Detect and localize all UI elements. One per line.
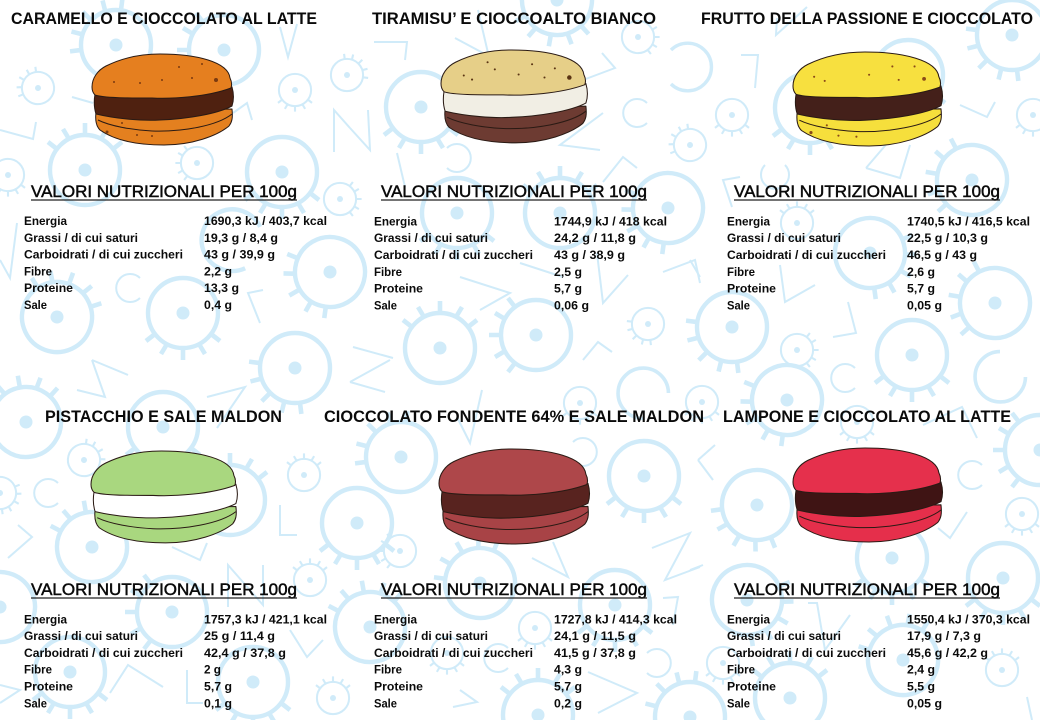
nutrition table: Fibre xyxy=(727,265,755,279)
nutrition table: Grassi / di cui saturi xyxy=(24,629,138,643)
title: CIOCCOLATO FONDENTE 64% E SALE MALDON xyxy=(324,408,704,426)
nutrition table: Carboidrati / di cui zuccheri xyxy=(24,646,183,660)
nutrition table: 0,05 g xyxy=(907,696,942,710)
nutrition table: Proteine xyxy=(374,680,423,694)
nutrition table: Sale xyxy=(727,298,750,312)
nutrition table: 24,1 g / 11,5 g xyxy=(554,629,636,643)
nutrition table: 13,3 g xyxy=(204,281,239,295)
panel: tiramisu xyxy=(372,10,667,312)
nutrition table: Carboidrati / di cui zuccheri xyxy=(24,248,183,262)
nutrition table: 42,4 g / 37,8 g xyxy=(204,646,286,660)
nutrition table: 0,4 g xyxy=(204,298,232,312)
nutrition table: 17,9 g / 7,3 g xyxy=(907,629,981,643)
nutrition table: 2,6 g xyxy=(907,265,935,279)
nutrition table xyxy=(374,214,667,312)
nutrition table: 2,5 g xyxy=(554,265,582,279)
macaron illustration: caramello xyxy=(92,54,234,145)
nutrition table: Grassi / di cui saturi xyxy=(374,629,488,643)
nutrition table xyxy=(727,612,1030,710)
nutrition table: Proteine xyxy=(24,680,73,694)
title: PISTACCHIO E SALE MALDON xyxy=(45,408,282,426)
nutrition table: Energia xyxy=(24,612,67,626)
nutrition table: 4,3 g xyxy=(554,663,582,677)
nutrition table: 25 g / 11,4 g xyxy=(204,629,275,643)
nutrition table: Sale xyxy=(24,298,47,312)
nutrition table: 0,1 g xyxy=(204,696,232,710)
nutrition table: 43 g / 38,9 g xyxy=(554,248,625,262)
nutrition table: 1744,9 kJ / 418 kcal xyxy=(554,214,667,228)
nutrition table: Energia xyxy=(374,612,417,626)
nutrition table: Sale xyxy=(374,298,397,312)
nutrition table: 5,7 g xyxy=(554,282,582,296)
nutrition table: 41,5 g / 37,8 g xyxy=(554,646,636,660)
nutrition table: Carboidrati / di cui zuccheri xyxy=(374,646,533,660)
nutrition table: Sale xyxy=(374,696,397,710)
macaron illustration: pistacchio xyxy=(91,451,237,543)
nutrition table: 1757,3 kJ / 421,1 kcal xyxy=(204,612,327,626)
nutrition table: Energia xyxy=(24,214,67,228)
heading with underline: VALORI NUTRIZIONALI PER 100g xyxy=(31,580,297,599)
nutrition table: Carboidrati / di cui zuccheri xyxy=(727,248,886,262)
nutrition table: 5,7 g xyxy=(204,680,232,694)
nutrition table: 19,3 g / 8,4 g xyxy=(204,231,278,245)
panel: frutto della passione xyxy=(701,10,1033,312)
nutrition table: 2 g xyxy=(204,663,221,677)
heading with underline: VALORI NUTRIZIONALI PER 100g xyxy=(734,580,1000,599)
nutrition table: 46,5 g / 43 g xyxy=(907,248,977,262)
nutrition table: Carboidrati / di cui zuccheri xyxy=(727,646,886,660)
nutrition table: 2,4 g xyxy=(907,663,935,677)
nutrition table: 2,2 g xyxy=(204,264,232,278)
nutrition table: 0,05 g xyxy=(907,298,942,312)
macaron illustration: cioccolato fondente xyxy=(439,449,590,544)
nutrition table: 24,2 g / 11,8 g xyxy=(554,231,636,245)
nutrition table: Energia xyxy=(374,214,417,228)
nutrition table: Grassi / di cui saturi xyxy=(727,231,841,245)
heading with underline: VALORI NUTRIZIONALI PER 100g xyxy=(734,182,1000,201)
nutrition table: Carboidrati / di cui zuccheri xyxy=(374,248,533,262)
panel: pistacchio xyxy=(24,408,327,710)
title: FRUTTO DELLA PASSIONE E CIOCCOLATO xyxy=(701,10,1033,28)
nutrition table: Energia xyxy=(727,612,770,626)
nutrition table: Fibre xyxy=(374,265,402,279)
nutrition table: 1690,3 kJ / 403,7 kcal xyxy=(204,214,327,228)
nutrition table: 0,06 g xyxy=(554,298,589,312)
panel: lampone xyxy=(723,408,1030,710)
nutrition table: Fibre xyxy=(727,663,755,677)
panel: caramello xyxy=(11,10,327,312)
nutrition table: 5,7 g xyxy=(907,282,935,296)
title: CARAMELLO E CIOCCOLATO AL LATTE xyxy=(11,10,317,28)
nutrition table: 0,2 g xyxy=(554,696,582,710)
nutrition table: Energia xyxy=(727,214,770,228)
nutrition table xyxy=(727,214,1030,312)
heading with underline: VALORI NUTRIZIONALI PER 100g xyxy=(381,182,647,201)
nutrition table: Grassi / di cui saturi xyxy=(727,629,841,643)
macaron illustration: tiramisu xyxy=(441,50,587,143)
nutrition table: Proteine xyxy=(727,680,776,694)
nutrition table xyxy=(24,214,327,312)
title: TIRAMISU’ E CIOCCOALTO BIANCO xyxy=(372,10,656,28)
nutrition table: Fibre xyxy=(24,264,52,278)
panel: cioccolato fondente xyxy=(324,408,704,710)
nutrition table: Sale xyxy=(24,696,47,710)
nutrition table: 22,5 g / 10,3 g xyxy=(907,231,988,245)
macaron illustration: lampone xyxy=(793,448,943,542)
heading with underline: VALORI NUTRIZIONALI PER 100g xyxy=(31,182,297,201)
nutrition table: Sale xyxy=(727,696,750,710)
nutrition table: Proteine xyxy=(727,282,776,296)
heading with underline: VALORI NUTRIZIONALI PER 100g xyxy=(381,580,647,599)
nutrition table: 1740,5 kJ / 416,5 kcal xyxy=(907,214,1030,228)
nutrition table: 1727,8 kJ / 414,3 kcal xyxy=(554,612,677,626)
nutrition table: Grassi / di cui saturi xyxy=(24,231,138,245)
nutrition table: Proteine xyxy=(374,282,423,296)
nutrition table: 45,6 g / 42,2 g xyxy=(907,646,988,660)
nutrition table: 1550,4 kJ / 370,3 kcal xyxy=(907,612,1030,626)
macaron illustration: frutto della passione xyxy=(793,52,943,146)
nutrition table: Fibre xyxy=(374,663,402,677)
nutrition table: Proteine xyxy=(24,281,73,295)
nutrition table: Grassi / di cui saturi xyxy=(374,231,488,245)
nutrition table: 43 g / 39,9 g xyxy=(204,248,275,262)
nutrition table: 5,5 g xyxy=(907,680,935,694)
nutrition table: Fibre xyxy=(24,663,52,677)
nutrition table: 5,7 g xyxy=(554,680,582,694)
nutrition table xyxy=(24,612,327,710)
title: LAMPONE E CIOCCOLATO AL LATTE xyxy=(723,408,1011,426)
nutrition table xyxy=(374,612,677,710)
